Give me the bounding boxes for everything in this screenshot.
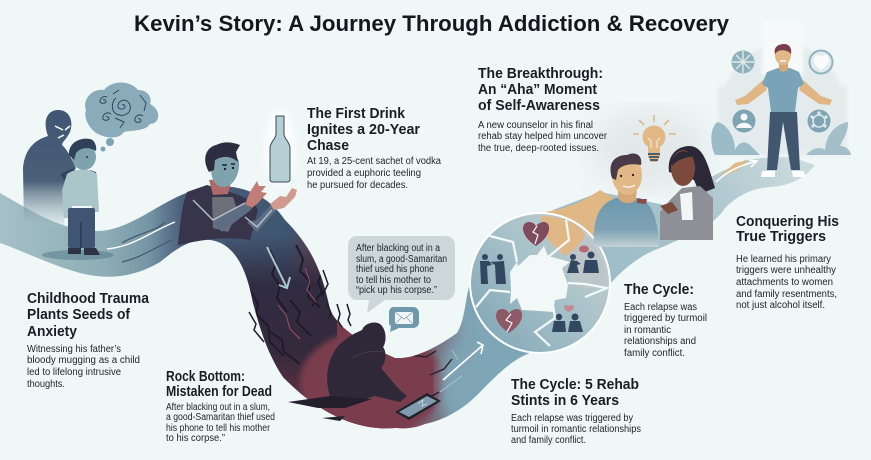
text: childhood trauma: Anxiety xyxy=(27,324,77,340)
swoosh xyxy=(107,222,175,249)
recovery scene xyxy=(711,20,851,177)
icon: broken heart lower xyxy=(496,309,522,333)
thought bubble xyxy=(85,82,158,152)
boy xyxy=(62,139,100,255)
cycle ring xyxy=(470,213,610,353)
text: rock bottom: Rock Bottom: xyxy=(166,369,245,385)
halo xyxy=(718,43,847,155)
hair xyxy=(205,142,240,172)
text: rock bottom: Mistaken for Dead xyxy=(166,384,272,400)
text: breakthrough: A new counselor in his final xyxy=(478,120,593,131)
text: the cycle: triggered by turmoil xyxy=(624,313,707,324)
text: the cycle: Each relapse was xyxy=(624,302,697,313)
text: five rehab stints: Each relapse was triggered by xyxy=(511,413,633,424)
text: first drink: At 19, a 25-cent sachet of vodka xyxy=(307,156,441,167)
text: childhood trauma: Childhood Trauma xyxy=(27,291,150,307)
plant right xyxy=(806,122,851,155)
bubble text: “pick up his corpse.” xyxy=(356,285,437,296)
neck and face xyxy=(209,178,232,195)
text: childhood trauma: bloody mugging as a child xyxy=(27,355,140,366)
text: breakthrough: of Self-Awareness xyxy=(478,98,600,114)
man with bottle xyxy=(178,142,297,245)
bubble text: slum, a good-Samaritan xyxy=(356,254,447,265)
text: first drink: provided a euphoric teeling xyxy=(307,168,421,179)
icon: confrontation xyxy=(480,254,506,284)
text: childhood trauma: led to lifelong intrusive xyxy=(27,367,121,378)
icon: brain xyxy=(732,50,754,74)
text: the cycle: in romantic xyxy=(624,325,671,336)
icon: broken heart top xyxy=(523,222,549,246)
text: the cycle: relationships and xyxy=(624,336,696,347)
childhood scene xyxy=(23,110,114,260)
woman xyxy=(669,146,715,194)
man with shirt xyxy=(594,198,659,247)
bubble text: thief used his phone xyxy=(356,264,434,275)
center star xyxy=(510,246,570,312)
text: conquering triggers: not just alcohol itself. xyxy=(736,300,825,311)
icon: couple with heart xyxy=(552,305,583,332)
bubble text xyxy=(356,243,447,296)
text: childhood trauma: thoughts. xyxy=(27,379,65,390)
text: the cycle: family conflict. xyxy=(624,348,685,359)
text: breakthrough: The Breakthrough: xyxy=(478,66,603,82)
text: childhood trauma: Plants Seeds of xyxy=(27,307,130,323)
text: childhood trauma: Witnessing his father’s xyxy=(27,344,121,355)
soft haze xyxy=(590,110,710,190)
upper ribbon xyxy=(545,157,815,284)
text: conquering triggers: True Triggers xyxy=(736,229,826,245)
icon: bottle xyxy=(265,110,295,186)
text: first drink: Chase xyxy=(307,138,349,154)
silhouette xyxy=(327,323,407,402)
text: conquering triggers: Conquering His xyxy=(736,214,839,230)
hands xyxy=(245,181,267,208)
text: first drink: he pursued for decades. xyxy=(307,180,408,191)
man standing xyxy=(735,44,832,177)
text: five rehab stints: Stints in 6 Years xyxy=(511,393,619,409)
text: the cycle xyxy=(624,282,707,359)
icon: down arrow xyxy=(267,247,290,288)
text: breakthrough xyxy=(478,66,608,154)
cracks outside ribbon xyxy=(249,270,351,342)
rock bottom figure xyxy=(288,323,441,421)
segment dividers xyxy=(476,220,607,346)
bubble text: After blacking out in a xyxy=(356,243,440,254)
text: conquering triggers: and family resentments, xyxy=(736,289,837,300)
text: breakthrough: An “Aha” Moment xyxy=(478,82,597,98)
title: Kevin’s Story: A Journey Through Addiction & Recovery xyxy=(134,11,729,36)
text: five rehab stints: turmoil in romantic relationships xyxy=(511,424,641,435)
journey ribbon: descent xyxy=(0,186,530,428)
text: five rehab stints: The Cycle: 5 Rehab xyxy=(511,377,639,393)
bubble text: to tell his mother to xyxy=(356,275,431,286)
text: five rehab stints xyxy=(511,377,641,446)
icon: person xyxy=(732,110,756,132)
text: rock bottom: to his corpse.” xyxy=(166,433,225,444)
text: breakthrough: the true, deep-rooted issues. xyxy=(478,143,599,154)
text: five rehab stints: and family conflict. xyxy=(511,435,586,446)
text: rock bottom: a good-Samaritan thief used xyxy=(166,412,275,423)
text: first drink: Ignites a 20-Year xyxy=(307,122,420,138)
text: first drink: The First Drink xyxy=(307,106,405,122)
text: first drink xyxy=(307,106,441,191)
icon: heart xyxy=(810,50,832,74)
shadow xyxy=(42,250,114,260)
text: breakthrough: rehab stay helped him uncover xyxy=(478,131,608,142)
counselor scene xyxy=(594,146,715,247)
text: conquering triggers: He learned his primary xyxy=(736,254,831,265)
icon: phone xyxy=(395,393,441,420)
rising arrow xyxy=(440,342,483,392)
plant left xyxy=(711,122,760,155)
text: childhood trauma xyxy=(27,291,150,390)
text: the cycle: The Cycle: xyxy=(624,282,694,298)
icon: light bulb xyxy=(633,115,676,162)
text: rock bottom: After blacking out in a slum, xyxy=(166,402,270,413)
text: rock bottom xyxy=(166,369,275,444)
text: conquering triggers xyxy=(736,214,839,311)
attacker silhouette xyxy=(23,110,97,228)
speech bubble xyxy=(348,236,455,313)
icon: community xyxy=(808,110,830,132)
icon: envelope xyxy=(389,307,419,332)
text: conquering triggers: attachments to women xyxy=(736,277,833,288)
icon: arguing couple xyxy=(567,246,599,273)
torso xyxy=(178,185,258,245)
arms xyxy=(213,203,278,232)
text: conquering triggers: triggers were unhealthy xyxy=(736,265,836,276)
text: rock bottom: his phone to tell his mother xyxy=(166,423,271,434)
